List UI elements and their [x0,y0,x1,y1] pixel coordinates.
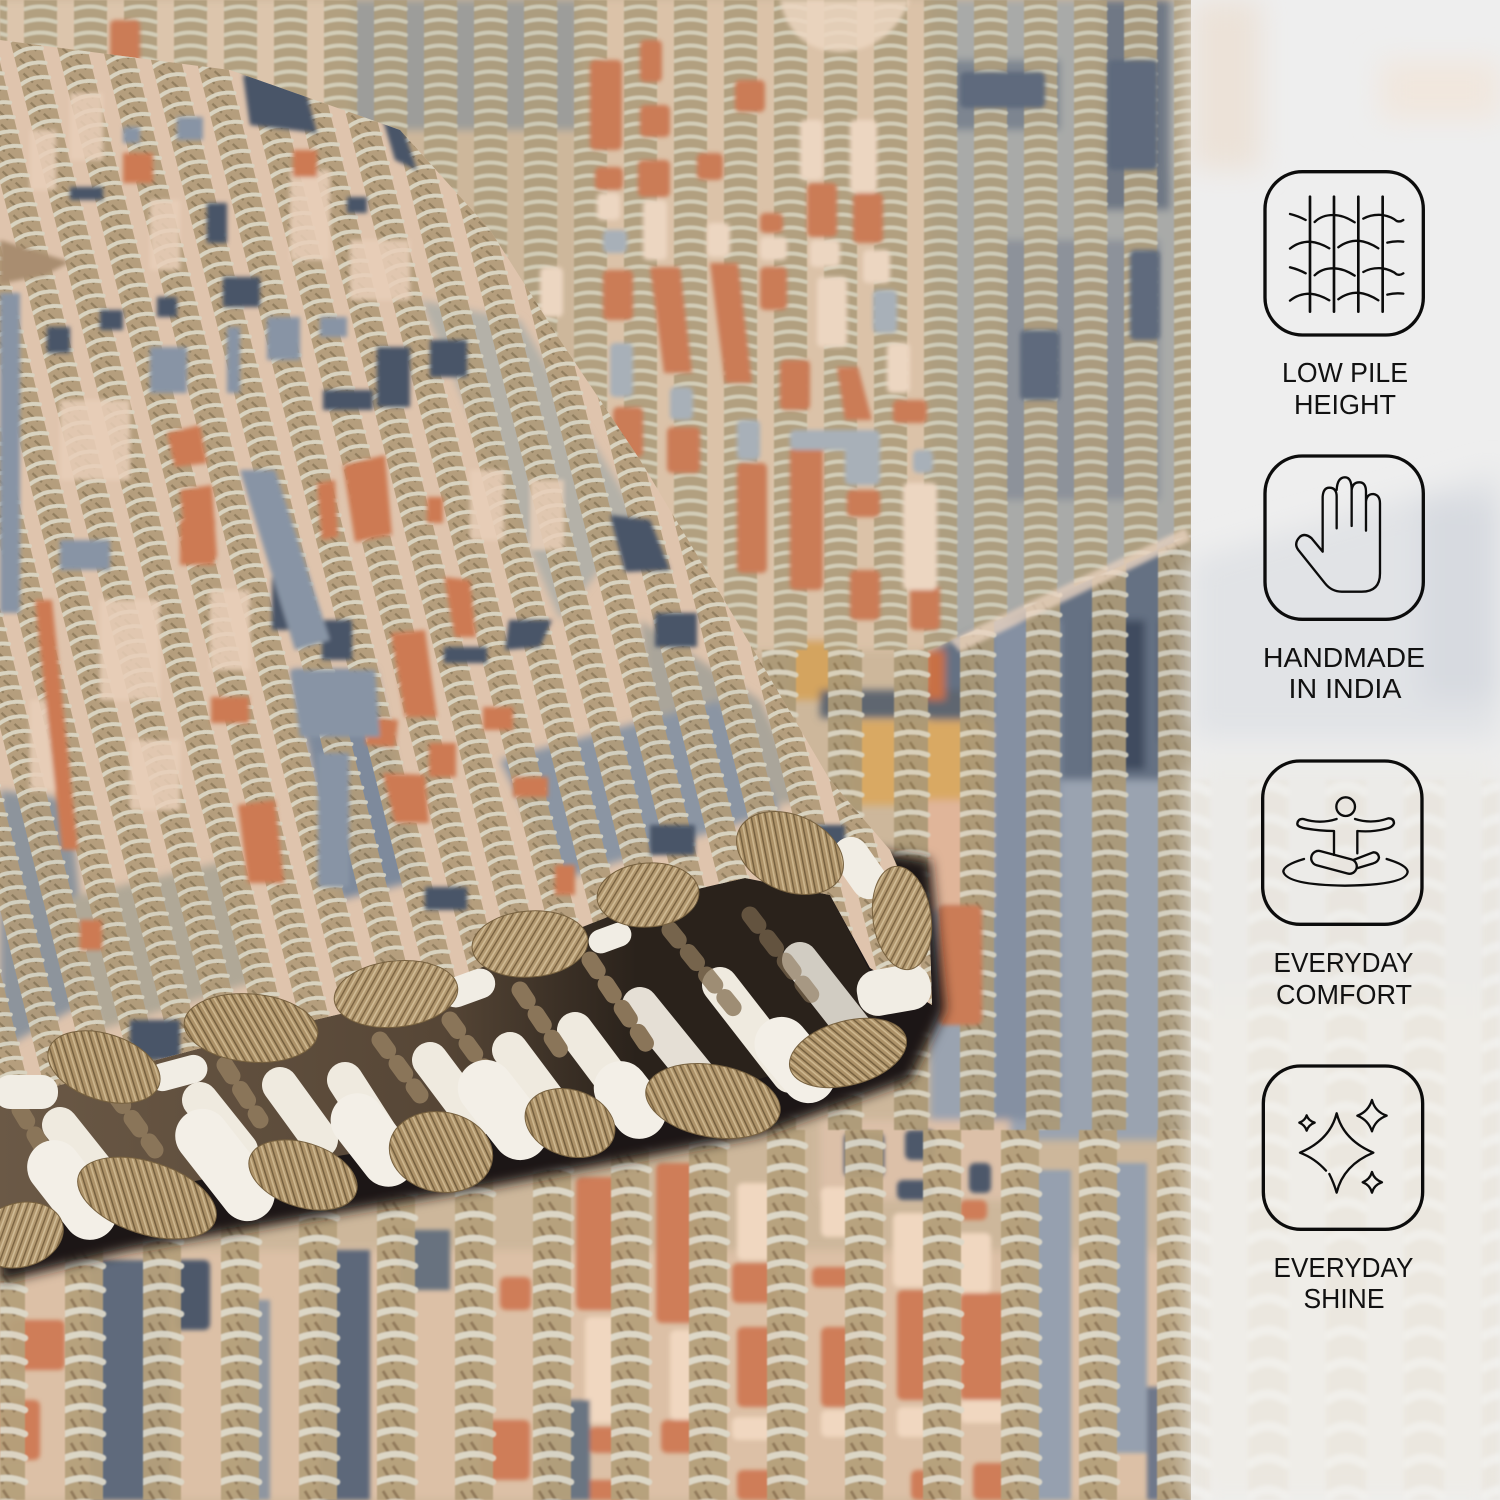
rug floor: weave texture [0,0,1191,1500]
label: low pile height: HEIGHT [1294,389,1396,420]
fold colour fragments [0,70,845,1060]
faded rug pattern in panel [1191,0,1500,1500]
feature: everyday shine [1263,1066,1423,1314]
label: everyday shine: SHINE [1304,1283,1384,1314]
upper edge: jute knots [47,811,932,1104]
shadow under fold [0,820,945,1282]
label: everyday comfort [1274,947,1414,1010]
label: everyday shine: EVERYDAY [1274,1252,1414,1283]
fold: upper rolled layer of rug [0,40,932,1086]
icon: sparkles [1263,1066,1423,1229]
feature: handmade in India [1263,456,1425,704]
feature: low pile height [1265,172,1423,420]
side panel: translucent white strip [1191,0,1500,1500]
rug floor: upper colour blocks [110,0,1191,1025]
photo: woven rug close-up [0,0,1191,1500]
label: low pile height [1282,357,1408,420]
fold mouth: dark interior [0,878,885,1220]
feature: everyday comfort [1263,761,1422,1010]
inner white bands [20,915,855,1175]
curl of white fabric at fold edge [0,830,934,1109]
label: handmade in India: HANDMADE [1263,642,1425,673]
label: everyday comfort: EVERYDAY [1274,947,1414,978]
icon: raised hand [1265,456,1423,619]
rug floor: broad colour zones [0,0,1191,1500]
label: handmade in India [1263,642,1425,704]
label: handmade in India: IN INDIA [1288,673,1402,704]
label: everyday comfort: COMFORT [1276,979,1412,1010]
label: low pile height: LOW PILE [1282,357,1408,388]
icon: woven threads [1265,172,1423,335]
lower edge: white tubes and jute knots [0,1006,914,1277]
label: everyday shine [1274,1252,1414,1314]
icon: seated person [1263,761,1422,924]
rug floor: lower colour blocks [0,1130,1191,1500]
